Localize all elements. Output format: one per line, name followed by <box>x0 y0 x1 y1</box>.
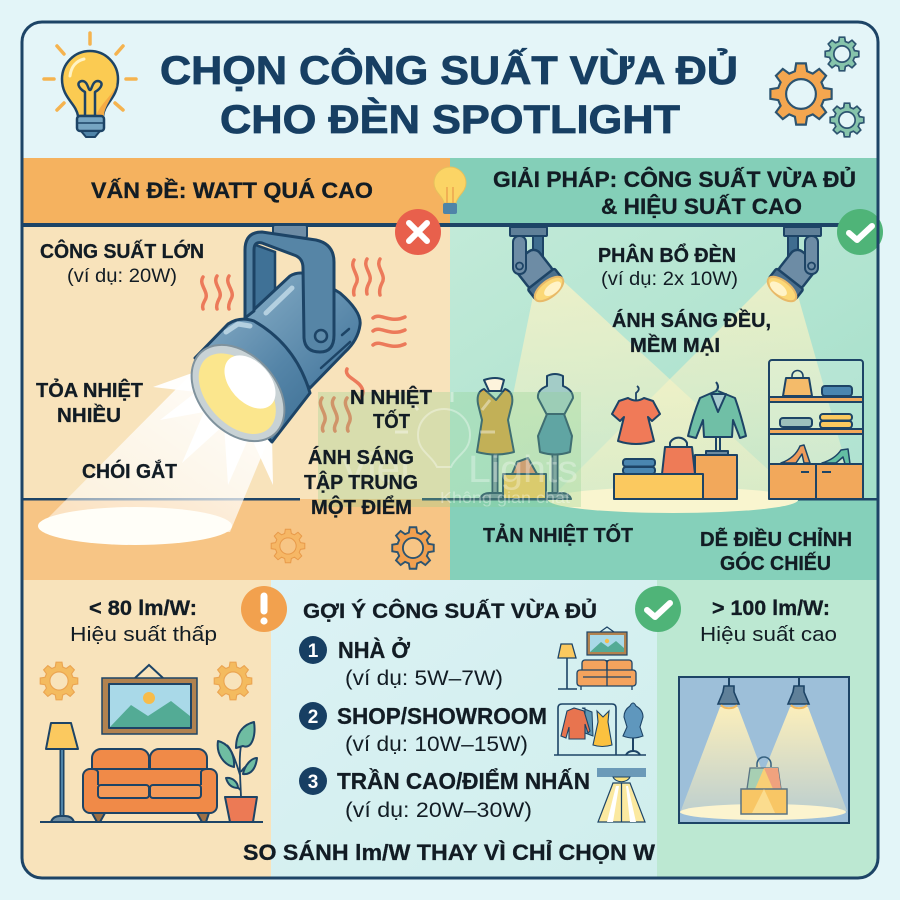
list item 2: (ví dụ: 10W–15W) <box>345 733 528 756</box>
text: solution labels: (ví dụ: 2x 10W) <box>601 269 738 290</box>
icon: light bulb top left <box>44 33 136 137</box>
title <box>160 47 738 142</box>
text: solution labels: TẢN NHIỆT TỐT <box>483 523 633 547</box>
icon: gears top right <box>770 37 864 137</box>
icon: shop rack <box>554 703 646 755</box>
text: problem labels: CHÓI GẮT <box>82 459 177 483</box>
text: low efficiency <box>70 597 217 646</box>
icon: shop mannequins <box>477 374 573 499</box>
illustration: living room <box>40 662 263 822</box>
text: solution labels: ÁNH SÁNG ĐỀU, <box>612 309 771 332</box>
watermark <box>318 392 581 507</box>
list item 1: (ví dụ: 5W–7W) <box>345 667 503 690</box>
list item 1: NHÀ Ở <box>338 635 410 663</box>
heading: solution: GIẢI PHÁP: CÔNG SUẤT VỪA ĐỦ <box>493 167 856 192</box>
text: high efficiency: > 100 lm/W: <box>712 597 830 620</box>
panel backgrounds <box>24 158 876 876</box>
icon: check mark bottom <box>635 586 681 632</box>
text: problem labels: NHIỀU <box>57 404 121 427</box>
icon: clothes and bags display <box>612 382 746 499</box>
watermark: Không gian chất <box>440 490 571 507</box>
text: takeaway: SO SÁNH lm/W THAY VÌ CHỈ CHỌN W <box>243 840 655 865</box>
text: problem labels: TỎA NHIỆT <box>36 378 143 402</box>
list item 2: SHOP/SHOWROOM <box>337 703 547 729</box>
watermark: Lights <box>468 449 578 491</box>
icon: bad mark <box>395 209 441 255</box>
text: problem labels: N NHIỆT <box>350 385 432 409</box>
text: problem labels: MỘT ĐIỂM <box>311 495 412 519</box>
list item 2: 2 <box>308 707 318 728</box>
heading: solution <box>493 167 856 219</box>
list item 2 <box>299 702 547 756</box>
text: suggestion heading: GỢI Ý CÔNG SUẤT VỪA ĐỦ <box>303 599 597 623</box>
text: solution labels: DỄ ĐIỀU CHỈNH <box>700 528 852 551</box>
light beams from track spotlights <box>492 280 856 513</box>
icon: ceiling light <box>597 768 646 822</box>
icon: home <box>558 627 636 690</box>
list item 1 <box>299 635 503 690</box>
text: low efficiency: Hiệu suất thấp <box>70 623 217 646</box>
list item 3: 3 <box>308 772 318 793</box>
icon: good mark <box>837 209 883 255</box>
heading: solution: & HIỆU SUẤT CAO <box>601 194 802 219</box>
text: solution labels: PHÂN BỔ ĐÈN <box>598 243 736 267</box>
list item 3: TRẦN CAO/ĐIỂM NHẤN <box>337 767 590 794</box>
icon: large spotlight <box>173 225 360 459</box>
text: low efficiency: < 80 lm/W: <box>89 597 197 620</box>
list item 3 <box>299 767 590 822</box>
text: high efficiency: Hiệu suất cao <box>700 623 837 646</box>
text: solution labels: GÓC CHIẾU <box>720 551 831 575</box>
icon: left track spotlight <box>510 227 567 306</box>
light beam and glare <box>38 372 273 545</box>
icon: warning mark <box>241 586 287 632</box>
text: problem labels: TẬP TRUNG <box>304 470 418 494</box>
text: problem labels: ÁNH SÁNG <box>308 446 414 469</box>
text: problem labels: (ví dụ: 20W) <box>67 266 177 287</box>
watermark: Việt <box>340 444 412 491</box>
list item 3: (ví dụ: 20W–30W) <box>345 799 532 822</box>
text: problem labels: TỐT <box>373 409 410 433</box>
icon: center bulb <box>434 167 466 214</box>
text: high efficiency <box>700 597 837 646</box>
heading: problem: VẤN ĐỀ: WATT QUÁ CAO <box>91 178 373 203</box>
illustration: efficient shop lighting <box>679 677 849 823</box>
icon: heat waves <box>202 259 405 431</box>
icon: shelf unit <box>769 360 863 499</box>
list item 1: 1 <box>308 641 319 662</box>
text: solution labels: MỀM MẠI <box>630 334 720 357</box>
text: problem labels: CÔNG SUẤT LỚN <box>40 239 204 263</box>
text: problem labels <box>36 239 432 519</box>
text: solution labels <box>483 243 852 575</box>
icon: right track spotlight <box>764 227 821 306</box>
icon: small gears on orange band <box>271 527 434 569</box>
title: CHỌN CÔNG SUẤT VỪA ĐỦ <box>160 47 738 93</box>
title: CHO ĐÈN SPOTLIGHT <box>220 97 680 142</box>
